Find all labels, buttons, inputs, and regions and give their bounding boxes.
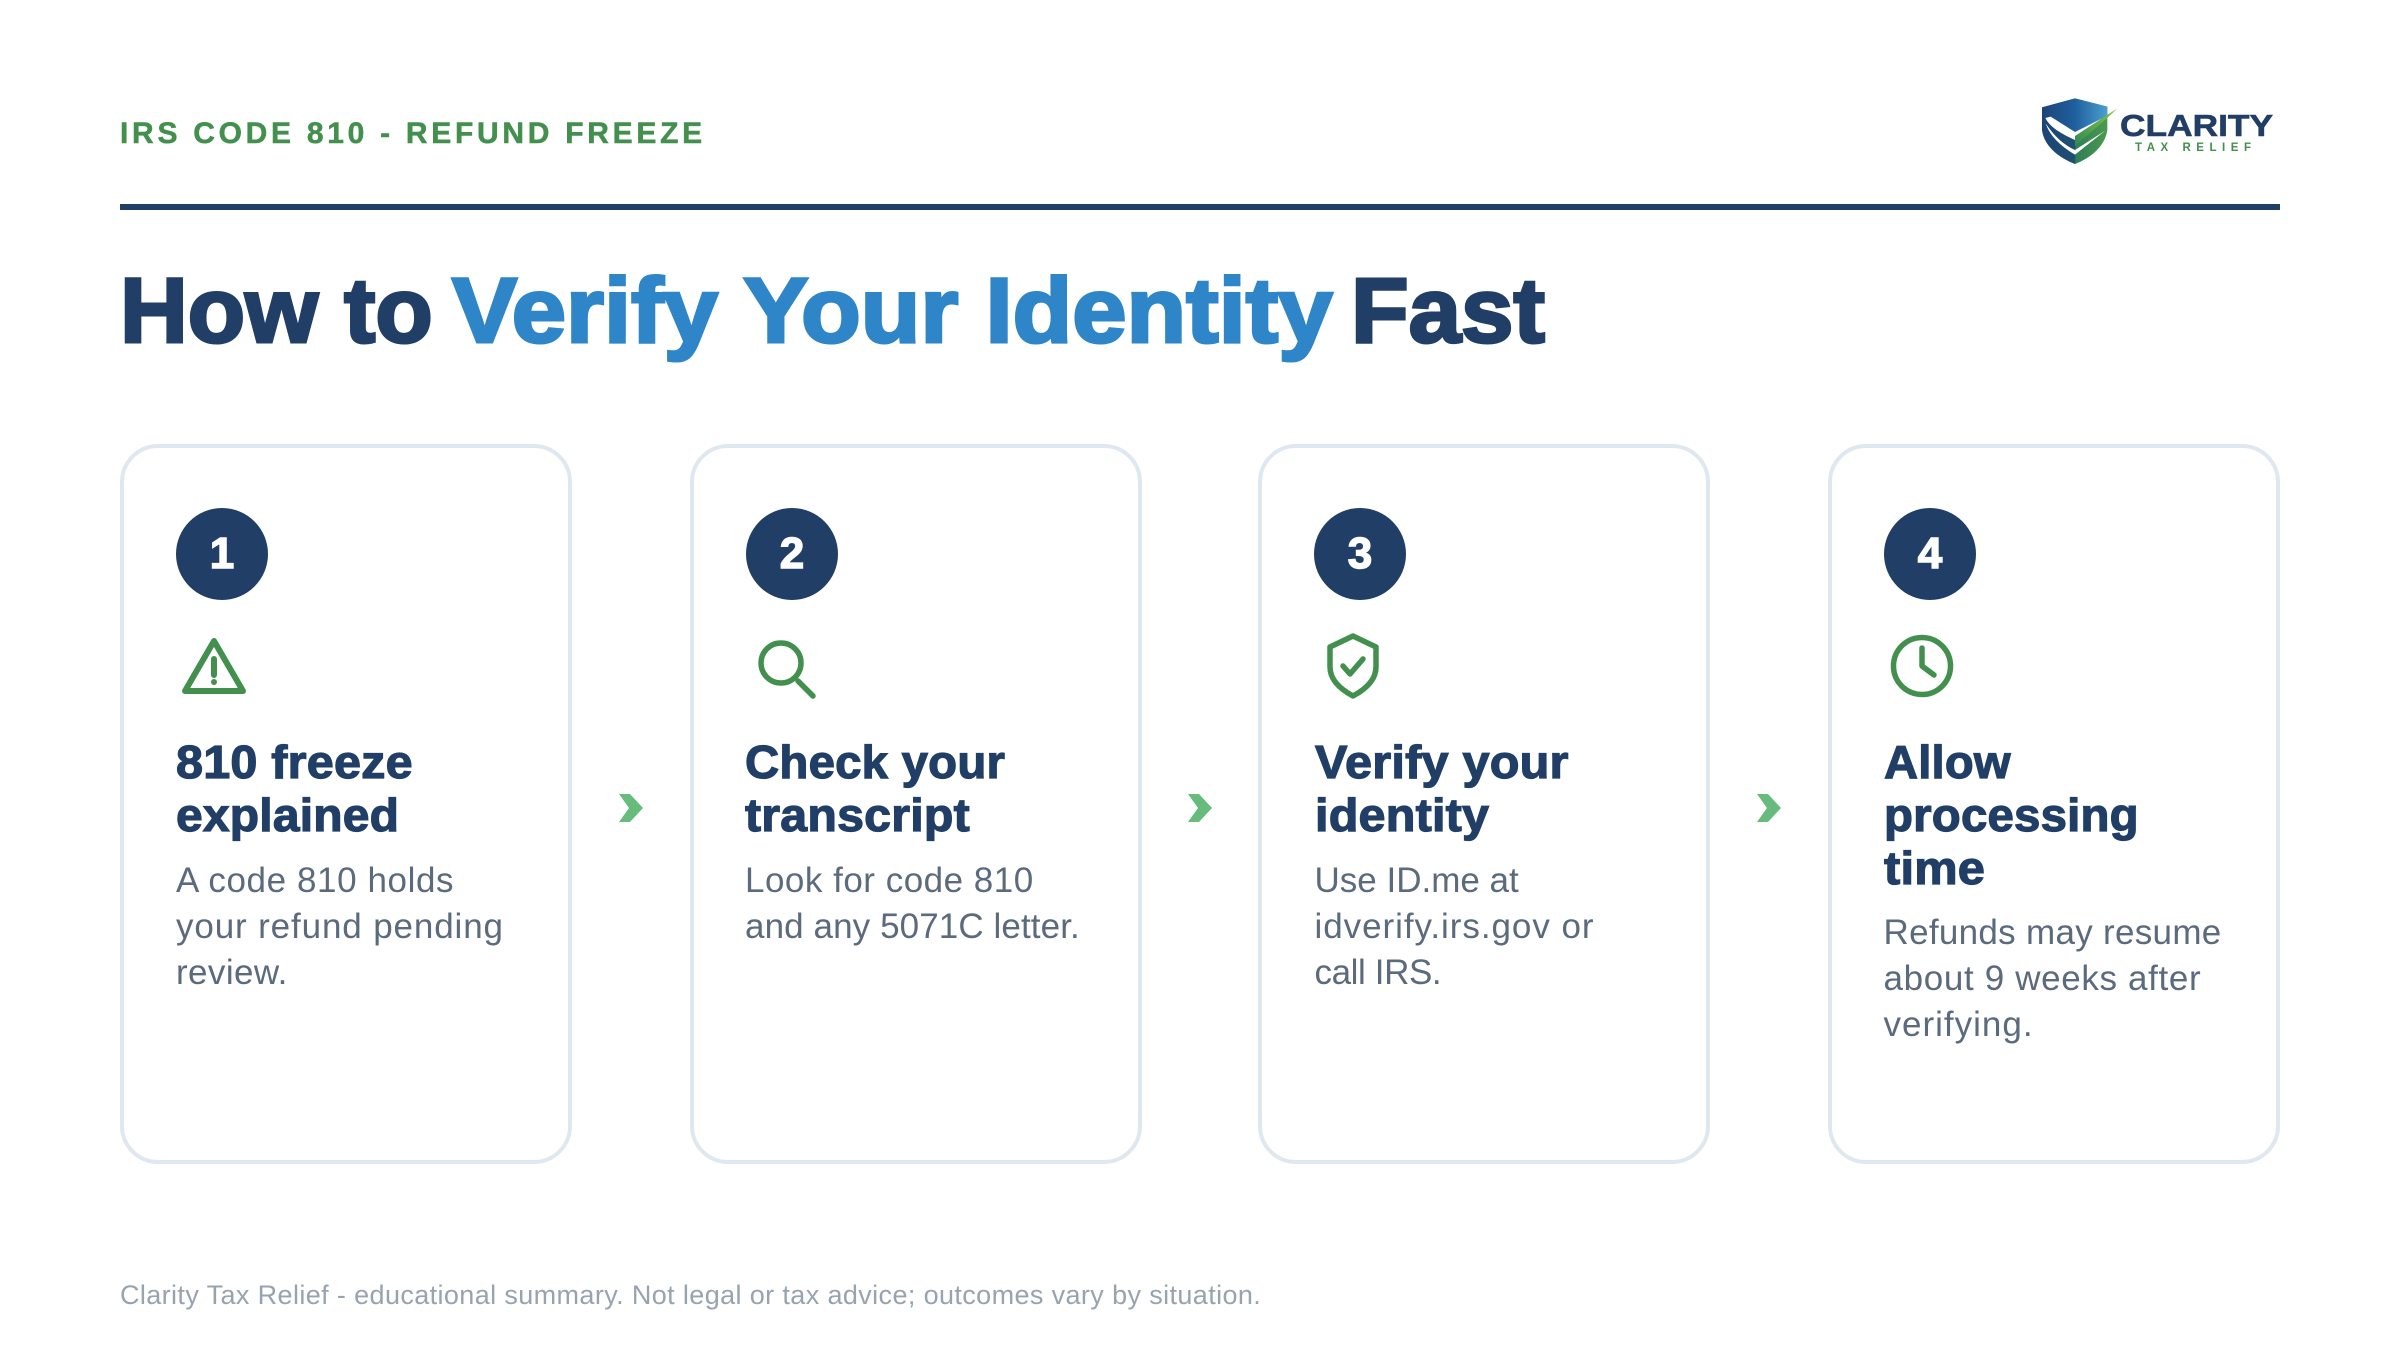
- step description: about 9 weeks after: [1884, 958, 2201, 998]
- step description: call IRS.: [1314, 952, 1441, 992]
- icon: shield check: [1327, 633, 1379, 699]
- eyebrow label: IRS CODE 810 - REFUND FREEZE: [120, 117, 706, 150]
- panel: step 4: [1828, 444, 2280, 1164]
- step number 3: [1314, 508, 1406, 600]
- step number 1: [176, 508, 268, 600]
- step heading: explained: [176, 789, 399, 841]
- step description: verifying.: [1884, 1004, 2034, 1044]
- step number 1: 1: [210, 529, 234, 578]
- step description: Refunds may resume: [1884, 912, 2222, 952]
- card outline: [690, 444, 1142, 1164]
- title: How to: [120, 260, 433, 362]
- card outline: [120, 444, 572, 1164]
- step number 4: [1884, 508, 1976, 600]
- step heading: processing: [1884, 789, 2138, 841]
- arrow: [619, 794, 643, 822]
- icon: clock: [1890, 634, 1954, 698]
- step description: [1884, 912, 2222, 1044]
- step heading: [176, 736, 413, 842]
- step heading: [1314, 736, 1568, 842]
- logo: TAX RELIEF: [2135, 142, 2251, 154]
- step description: Use ID.me at: [1314, 860, 1519, 900]
- step heading: [744, 736, 1005, 842]
- step heading: [1884, 736, 2138, 894]
- step heading: Allow: [1884, 736, 2010, 788]
- step description: idverify.irs.gov or: [1314, 906, 1594, 946]
- arrow: [1757, 794, 1781, 822]
- step number 2: 2: [780, 529, 804, 578]
- step description: Look for code 810: [745, 860, 1034, 900]
- arrow: [1188, 794, 1212, 822]
- logo: CLARITY: [2120, 108, 2273, 143]
- step description: [1314, 860, 1594, 992]
- step heading: transcript: [745, 789, 970, 841]
- icon: magnifier: [758, 640, 816, 699]
- step heading: identity: [1314, 789, 1489, 841]
- icon: warning triangle: [182, 638, 246, 694]
- step description: review.: [176, 952, 288, 992]
- panel: step 1: [120, 444, 572, 1164]
- title: Verify Your Identity: [452, 260, 1332, 362]
- card outline: [1258, 444, 1710, 1164]
- step heading: Verify your: [1314, 736, 1568, 788]
- step description: [176, 860, 504, 992]
- step description: A code 810 holds: [176, 860, 454, 900]
- card outline: [1828, 444, 2280, 1164]
- step heading: 810 freeze: [176, 736, 413, 788]
- footer disclaimer: Clarity Tax Relief - educational summary. Not legal or tax advice; outcomes vary by situation.: [120, 1280, 1261, 1310]
- step number 3: 3: [1348, 529, 1372, 578]
- panel: step 3: [1258, 444, 1710, 1164]
- step number 4: 4: [1918, 529, 1942, 578]
- step description: and any 5071C letter.: [745, 906, 1080, 946]
- header rule: [120, 204, 2280, 210]
- step heading: time: [1884, 842, 1985, 894]
- title: [120, 260, 1546, 362]
- panel: step 2: [690, 444, 1142, 1164]
- title: Fast: [1351, 260, 1545, 362]
- step heading: Check your: [745, 736, 1005, 788]
- logo: [2042, 98, 2273, 164]
- step number 2: [746, 508, 838, 600]
- step description: your refund pending: [176, 906, 504, 946]
- step description: [745, 860, 1080, 946]
